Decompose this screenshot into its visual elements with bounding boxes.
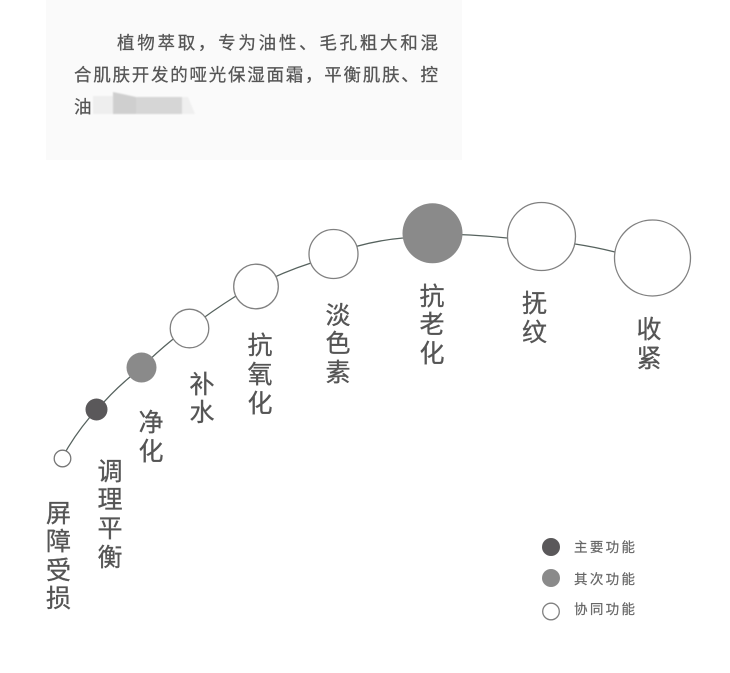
node: 屏障受损: [54, 450, 71, 467]
legend: [542, 538, 635, 620]
label: 补水: 水: [189, 399, 215, 427]
label: 净化: 净: [138, 409, 164, 437]
label: 收紧: 紧: [636, 345, 662, 373]
legend: synergistic function: 协同功能: [574, 602, 635, 617]
blurred redaction: [93, 92, 195, 114]
label: 调理平衡: 衡: [97, 544, 123, 572]
label: 抗氧化: 抗: [247, 332, 273, 360]
label: 抗老化: 抗: [419, 283, 445, 311]
label: 屏障受损: 障: [46, 528, 71, 556]
node: 收紧: [614, 220, 690, 296]
node: 净化: [126, 352, 156, 382]
node: 淡色素: [309, 230, 358, 278]
label: 屏障受损: 损: [46, 585, 71, 613]
curve connecting functions: [62, 234, 615, 458]
label: 调理平衡: 调: [97, 458, 123, 486]
label: 抚纹: 抚: [522, 290, 547, 318]
label: 净化: 化: [138, 438, 164, 466]
label: 抗氧化: 氧: [247, 361, 273, 389]
text block: description: 油: [74, 97, 92, 117]
label: 补水: 补: [189, 371, 215, 399]
label: 抗老化: 化: [419, 340, 445, 368]
label: 淡色素: 素: [325, 359, 351, 387]
label: 淡色素: 淡: [325, 302, 351, 330]
label: 收紧: 收: [636, 316, 662, 344]
label: 调理平衡: 理: [97, 486, 123, 514]
vertical labels: [46, 283, 662, 613]
text block: description: 植物萃取，专为油性、毛孔粗大和混: [117, 33, 438, 53]
legend: secondary function: 其次功能: [574, 572, 635, 587]
label: 抗老化: 老: [419, 311, 445, 339]
label: 抗氧化: 化: [247, 390, 273, 418]
label: 屏障受损: 屏: [46, 500, 71, 528]
node: 调理平衡: [86, 398, 108, 420]
label: 淡色素: 色: [325, 330, 351, 358]
node: 补水: [170, 309, 209, 348]
node: 抗老化: [402, 203, 462, 263]
panel: product description: [46, 0, 462, 160]
text block: description: 合肌肤开发的哑光保湿面霜，平衡肌肤、控: [74, 65, 438, 85]
legend: primary function: 主要功能: [574, 540, 635, 555]
function nodes: [54, 202, 690, 467]
label: 屏障受损: 受: [46, 557, 71, 585]
node: 抚纹: [508, 202, 576, 270]
label: 调理平衡: 平: [97, 515, 123, 543]
label: 抚纹: 纹: [522, 319, 547, 347]
node: 抗氧化: [234, 264, 278, 309]
text block: description: [74, 33, 438, 117]
